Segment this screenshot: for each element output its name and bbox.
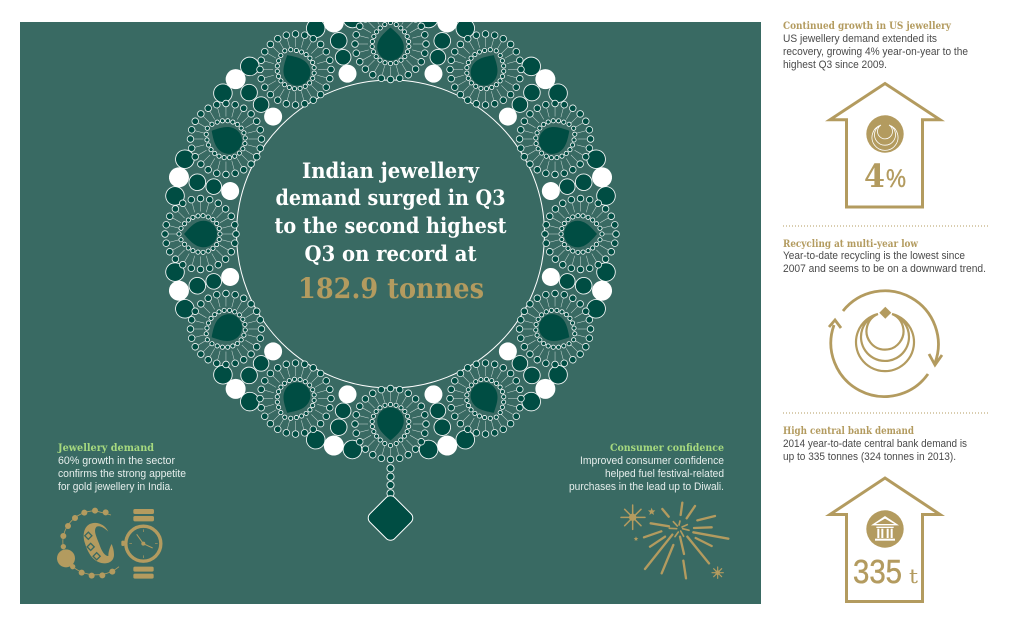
- text block: jewellery demand: confirms the strong appetite: [58, 468, 186, 480]
- text block: consumer confidence: helped fuel festival-related: [605, 468, 724, 480]
- text block: jewellery demand: 60% growth in the sector: [58, 455, 175, 467]
- text block: recycling: Recycling at multi-year low: [783, 238, 919, 250]
- text block: consumer confidence: Improved consumer confidence: [580, 455, 724, 467]
- text block: central bank demand: High central bank demand: [783, 425, 914, 437]
- text block: consumer confidence: [569, 442, 724, 493]
- title: Q3 on record at: [304, 242, 477, 267]
- arrow: up 4%: %: [886, 165, 906, 193]
- text block: recycling: Year-to-date recycling is the lowest since: [783, 250, 965, 262]
- text block: jewellery demand: [57, 442, 186, 493]
- icon: recycling arrows around necklace: [829, 291, 942, 397]
- icon: necklace, bangle and watch: [57, 508, 161, 579]
- title: to the second highest: [274, 214, 507, 239]
- text block: central bank demand: 2014 year-to-date central bank demand is: [783, 438, 967, 450]
- text block: recycling: 2007 and seems to be on a downward trend.: [783, 263, 986, 275]
- text block: consumer confidence: purchases in the lead up to Diwali.: [569, 481, 724, 493]
- title: demand surged in Q3: [276, 186, 506, 211]
- arrow: up 4%: 4: [864, 157, 885, 195]
- text block: continued growth in US jewellery: [783, 20, 968, 71]
- arrow: up 335t: 335: [853, 553, 902, 590]
- necklace illustration: [162, 5, 619, 463]
- title: [274, 159, 507, 305]
- text block: consumer confidence: Consumer confidence: [610, 442, 724, 454]
- text block: jewellery demand: Jewellery demand: [57, 442, 155, 454]
- text block: recycling: [783, 238, 986, 275]
- arrow: up 4%: [830, 84, 940, 207]
- text block: continued growth in US jewellery: US jewellery demand extended its: [783, 33, 937, 45]
- panel: green background: [20, 22, 761, 604]
- text block: continued growth in US jewellery: Continued growth in US jewellery: [783, 20, 952, 32]
- text block: jewellery demand: for gold jewellery in India.: [58, 481, 173, 493]
- icon: fireworks: [621, 503, 728, 578]
- text block: central bank demand: up to 335 tonnes (324 tonnes in 2013).: [783, 451, 956, 463]
- text block: continued growth in US jewellery: recovery, growing 4% year-on-year to the: [783, 46, 968, 58]
- arrow: up 335t: t: [909, 564, 918, 588]
- necklace pendant: [366, 465, 415, 543]
- text block: continued growth in US jewellery: highest Q3 since 2009.: [783, 59, 887, 71]
- arrow: up 335t: [830, 478, 940, 602]
- title: Indian jewellery: [302, 159, 479, 184]
- title: 182.9 tonnes: [298, 272, 484, 305]
- text block: central bank demand: [783, 425, 967, 463]
